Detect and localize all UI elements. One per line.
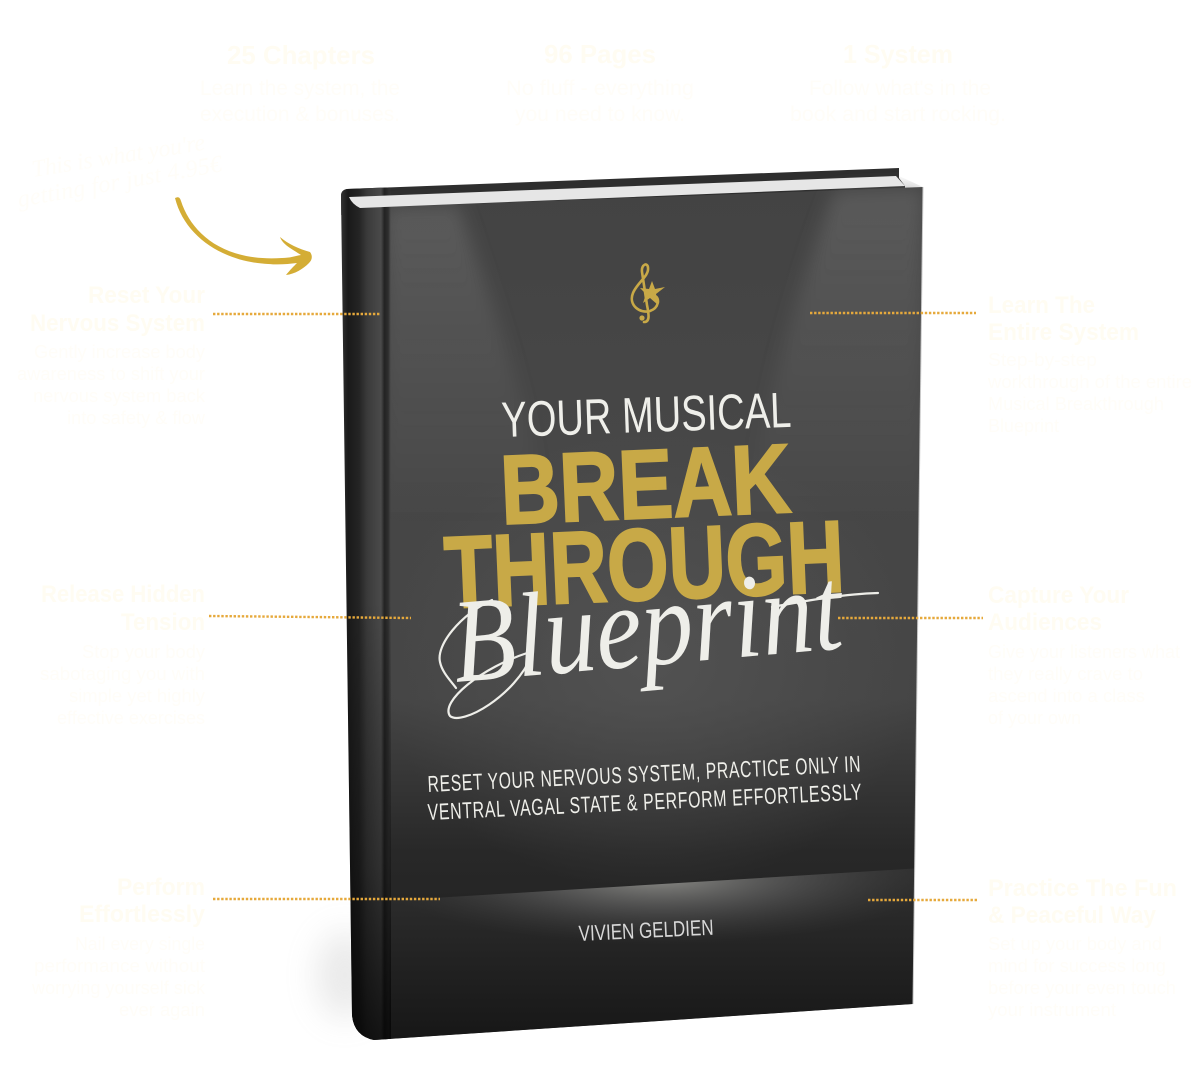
feature: Reset Your Nervous System: nervous system back: [33, 386, 206, 406]
back cover edge: [341, 163, 905, 215]
feature: Release Hidden Tension: Release Hidden: [41, 581, 205, 608]
top stat: 25 Chapters: 25 Chapters: [227, 40, 375, 70]
lower band: [385, 868, 923, 1045]
feature: Capture Your Audiences: Audiences: [988, 609, 1102, 636]
feature: Capture Your Audiences: [988, 582, 1180, 728]
front cover: [352, 187, 923, 1040]
feature: Perform Effortlessly: performance without: [34, 956, 205, 976]
title: THROUGH: THROUGH: [442, 499, 847, 630]
feature: Practice The Fun & Peaceful Way: before your even touch: [988, 978, 1176, 998]
top stat: 96 Pages: 96 Pages: [544, 39, 656, 69]
top stat: 25 Chapters: Learn the system, the: [200, 77, 400, 100]
feature: Release Hidden Tension: Tension: [121, 609, 205, 636]
feature: Release Hidden Tension: Stop your body: [82, 642, 205, 662]
left spotlight beam: [390, 204, 506, 398]
logo: treble clef with star: [632, 265, 665, 322]
top stat: 1 System: [790, 39, 1006, 126]
handwritten note: This is what you're: [30, 130, 207, 183]
top stat: 25 Chapters: execution & bonuses.: [200, 103, 400, 126]
cover centre glow: [526, 584, 775, 834]
feature: Reset Your Nervous System: [17, 282, 206, 428]
feature: Learn The Entire System: Musical Breakthrough: [988, 394, 1164, 414]
feature: Release Hidden Tension: effective exercises: [57, 708, 205, 728]
feature: Practice The Fun & Peaceful Way: Set up your body and: [988, 934, 1162, 954]
feature: Practice The Fun & Peaceful Way: [988, 875, 1177, 1020]
book shadow: [317, 931, 373, 1019]
right spotlight beam: [786, 178, 922, 390]
feature: Reset Your Nervous System: Nervous System: [30, 310, 205, 337]
feature: Learn The Entire System: Learn The: [988, 292, 1095, 319]
feature: Capture Your Audiences: Give your listeners what: [988, 642, 1180, 662]
spine: [341, 185, 391, 1045]
feature: Learn The Entire System: Entire System: [988, 319, 1139, 346]
feature: Capture Your Audiences: ascend into a class: [988, 686, 1145, 706]
top stat: 1 System: book and start rocking.: [790, 103, 1006, 126]
arrow pointing to book: [175, 197, 312, 275]
subtitle: VENTRAL VAGAL STATE & PERFORM EFFORTLESSLY: [427, 779, 863, 825]
top stat: 96 Pages: you need to know.: [515, 103, 685, 126]
page block: [349, 176, 905, 208]
feature: Learn The Entire System: Step-by-step: [988, 350, 1097, 370]
feature: Capture Your Audiences: they really crave to: [988, 664, 1143, 684]
title: BREAK: BREAK: [498, 423, 793, 545]
feature: Perform Effortlessly: [31, 874, 206, 1020]
feature: Release Hidden Tension: sabotaging you with: [40, 664, 205, 684]
top stat: 25 Chapters: [200, 40, 400, 126]
title: YOUR MUSICAL: YOUR MUSICAL: [500, 382, 792, 448]
feature: Perform Effortlessly: ever again: [119, 1000, 205, 1020]
feature: Practice The Fun & Peaceful Way: & Peaceful Way: [988, 902, 1157, 929]
flourish strokes: [440, 593, 878, 718]
handwritten note: getting for just 4.95€: [16, 151, 225, 213]
feature: Capture Your Audiences: Capture Your: [988, 582, 1129, 609]
feature: Perform Effortlessly: Perform: [117, 874, 205, 901]
subtitle: RESET YOUR NERVOUS SYSTEM, PRACTICE ONLY IN: [427, 751, 862, 797]
feature: Practice The Fun & Peaceful Way: your instrument: [988, 1000, 1116, 1020]
feature: Reset Your Nervous System: Gently increase body: [34, 342, 205, 362]
subtitle: [427, 751, 863, 825]
feature: Practice The Fun & Peaceful Way: Practice The Fun: [988, 875, 1177, 902]
feature: Reset Your Nervous System: into safety & flow: [67, 408, 206, 428]
feature: Release Hidden Tension: [40, 581, 205, 728]
feature: Practice The Fun & Peaceful Way: mind for success long: [988, 956, 1166, 976]
feature: Learn The Entire System: workthrough of the entire: [987, 372, 1192, 392]
book: [341, 163, 940, 1045]
cover right edge: [913, 187, 923, 1004]
feature: Reset Your Nervous System: Reset Your: [88, 282, 205, 309]
top stat: 96 Pages: No fluff - everything: [506, 77, 694, 100]
top stat: 1 System: 1 System: [843, 39, 953, 69]
connector lines: [209, 313, 983, 900]
top stat: 96 Pages: [506, 39, 694, 126]
title: Blueprint script: Blueprint: [447, 541, 849, 708]
feature: Release Hidden Tension: simple yet highly: [69, 686, 205, 706]
feature: Reset Your Nervous System: awareness to shift your: [17, 364, 205, 384]
band highlight: [454, 871, 878, 932]
feature: Learn The Entire System: Blueprint: [988, 416, 1059, 436]
author name: VIVIEN GELDIEN: [578, 915, 714, 946]
top stat: 1 System: Follow what's in the: [809, 77, 991, 100]
feature: Perform Effortlessly: Nail every single: [75, 934, 205, 954]
feature: Learn The Entire System: [987, 292, 1192, 436]
feature: Perform Effortlessly: Effortlessly: [79, 901, 206, 928]
feature: Capture Your Audiences: of your own: [988, 708, 1081, 728]
feature: Perform Effortlessly: worrying yourself sick: [31, 978, 206, 998]
